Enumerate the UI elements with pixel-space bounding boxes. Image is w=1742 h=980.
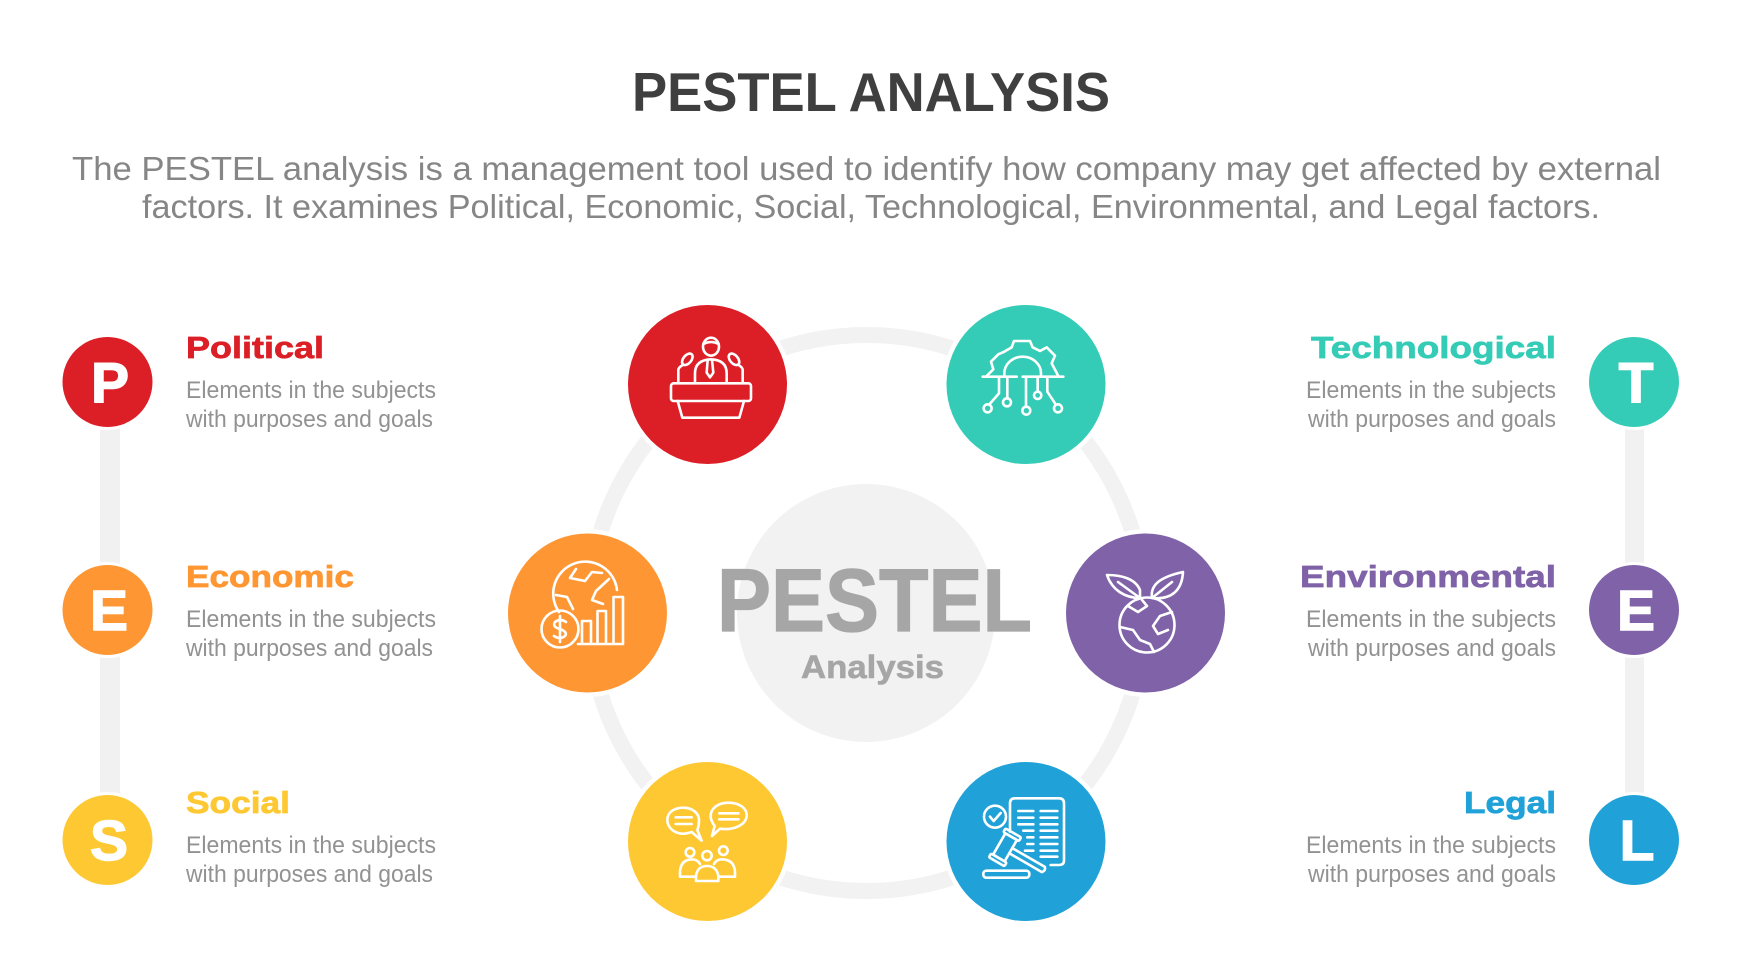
item: technological: Technological bbox=[1311, 330, 1556, 365]
item: environmental: Elements in the subjects bbox=[1306, 606, 1556, 633]
item: social bbox=[60, 785, 436, 888]
intro paragraph: factors. It examines Political, Economic, Social, Technological, Environmental, and Legal factors. bbox=[142, 188, 1600, 225]
item: political: Elements in the subjects bbox=[186, 377, 436, 404]
item: economic: E bbox=[90, 579, 128, 643]
item: environmental bbox=[1300, 559, 1682, 662]
item: social: Elements in the subjects bbox=[186, 832, 436, 859]
central diagram ring bbox=[588, 335, 1144, 891]
item: legal: with purposes and goals bbox=[1307, 861, 1556, 888]
item: economic: Economic bbox=[186, 559, 354, 594]
right timeline connector bbox=[1625, 382, 1644, 840]
item: social: S bbox=[90, 809, 128, 873]
item: environmental: Environmental bbox=[1300, 559, 1556, 594]
item: technological: T bbox=[1619, 351, 1654, 415]
icon circle: social speech bubbles and people bbox=[624, 758, 792, 926]
item: political bbox=[60, 330, 436, 433]
item: legal: Elements in the subjects bbox=[1306, 832, 1556, 859]
item: legal: L bbox=[1620, 809, 1654, 873]
icon circle: technological gear circuit bbox=[942, 300, 1110, 468]
intro paragraph bbox=[72, 150, 1661, 225]
item: technological bbox=[1306, 330, 1682, 433]
item: economic bbox=[60, 559, 436, 662]
item: legal bbox=[1306, 785, 1682, 888]
item: technological: Elements in the subjects bbox=[1306, 377, 1556, 404]
item: economic: with purposes and goals bbox=[185, 635, 433, 662]
icon circle: political podium bbox=[624, 300, 792, 468]
title: PESTEL ANALYSIS bbox=[632, 61, 1110, 123]
item: political: with purposes and goals bbox=[185, 406, 433, 433]
icon circle: economic globe and chart bbox=[504, 529, 672, 697]
item: social: Social bbox=[186, 785, 290, 820]
item: political: Political bbox=[186, 330, 324, 365]
item: technological: with purposes and goals bbox=[1307, 406, 1556, 433]
center hub: PESTEL bbox=[717, 550, 1032, 650]
item: political: P bbox=[91, 351, 129, 415]
left timeline connector bbox=[100, 382, 120, 840]
center hub: Analysis bbox=[801, 649, 944, 685]
item: environmental: E bbox=[1617, 579, 1655, 643]
item: social: with purposes and goals bbox=[185, 861, 433, 888]
center hub bbox=[717, 484, 1032, 742]
icon circle: environmental globe and leaves bbox=[1062, 529, 1230, 697]
item: legal: Legal bbox=[1464, 785, 1556, 820]
item: economic: Elements in the subjects bbox=[186, 606, 436, 633]
item: environmental: with purposes and goals bbox=[1307, 635, 1556, 662]
intro paragraph: The PESTEL analysis is a management tool used to identify how company may get affected by external bbox=[72, 150, 1661, 187]
icon circle: legal document and gavel bbox=[942, 758, 1110, 926]
